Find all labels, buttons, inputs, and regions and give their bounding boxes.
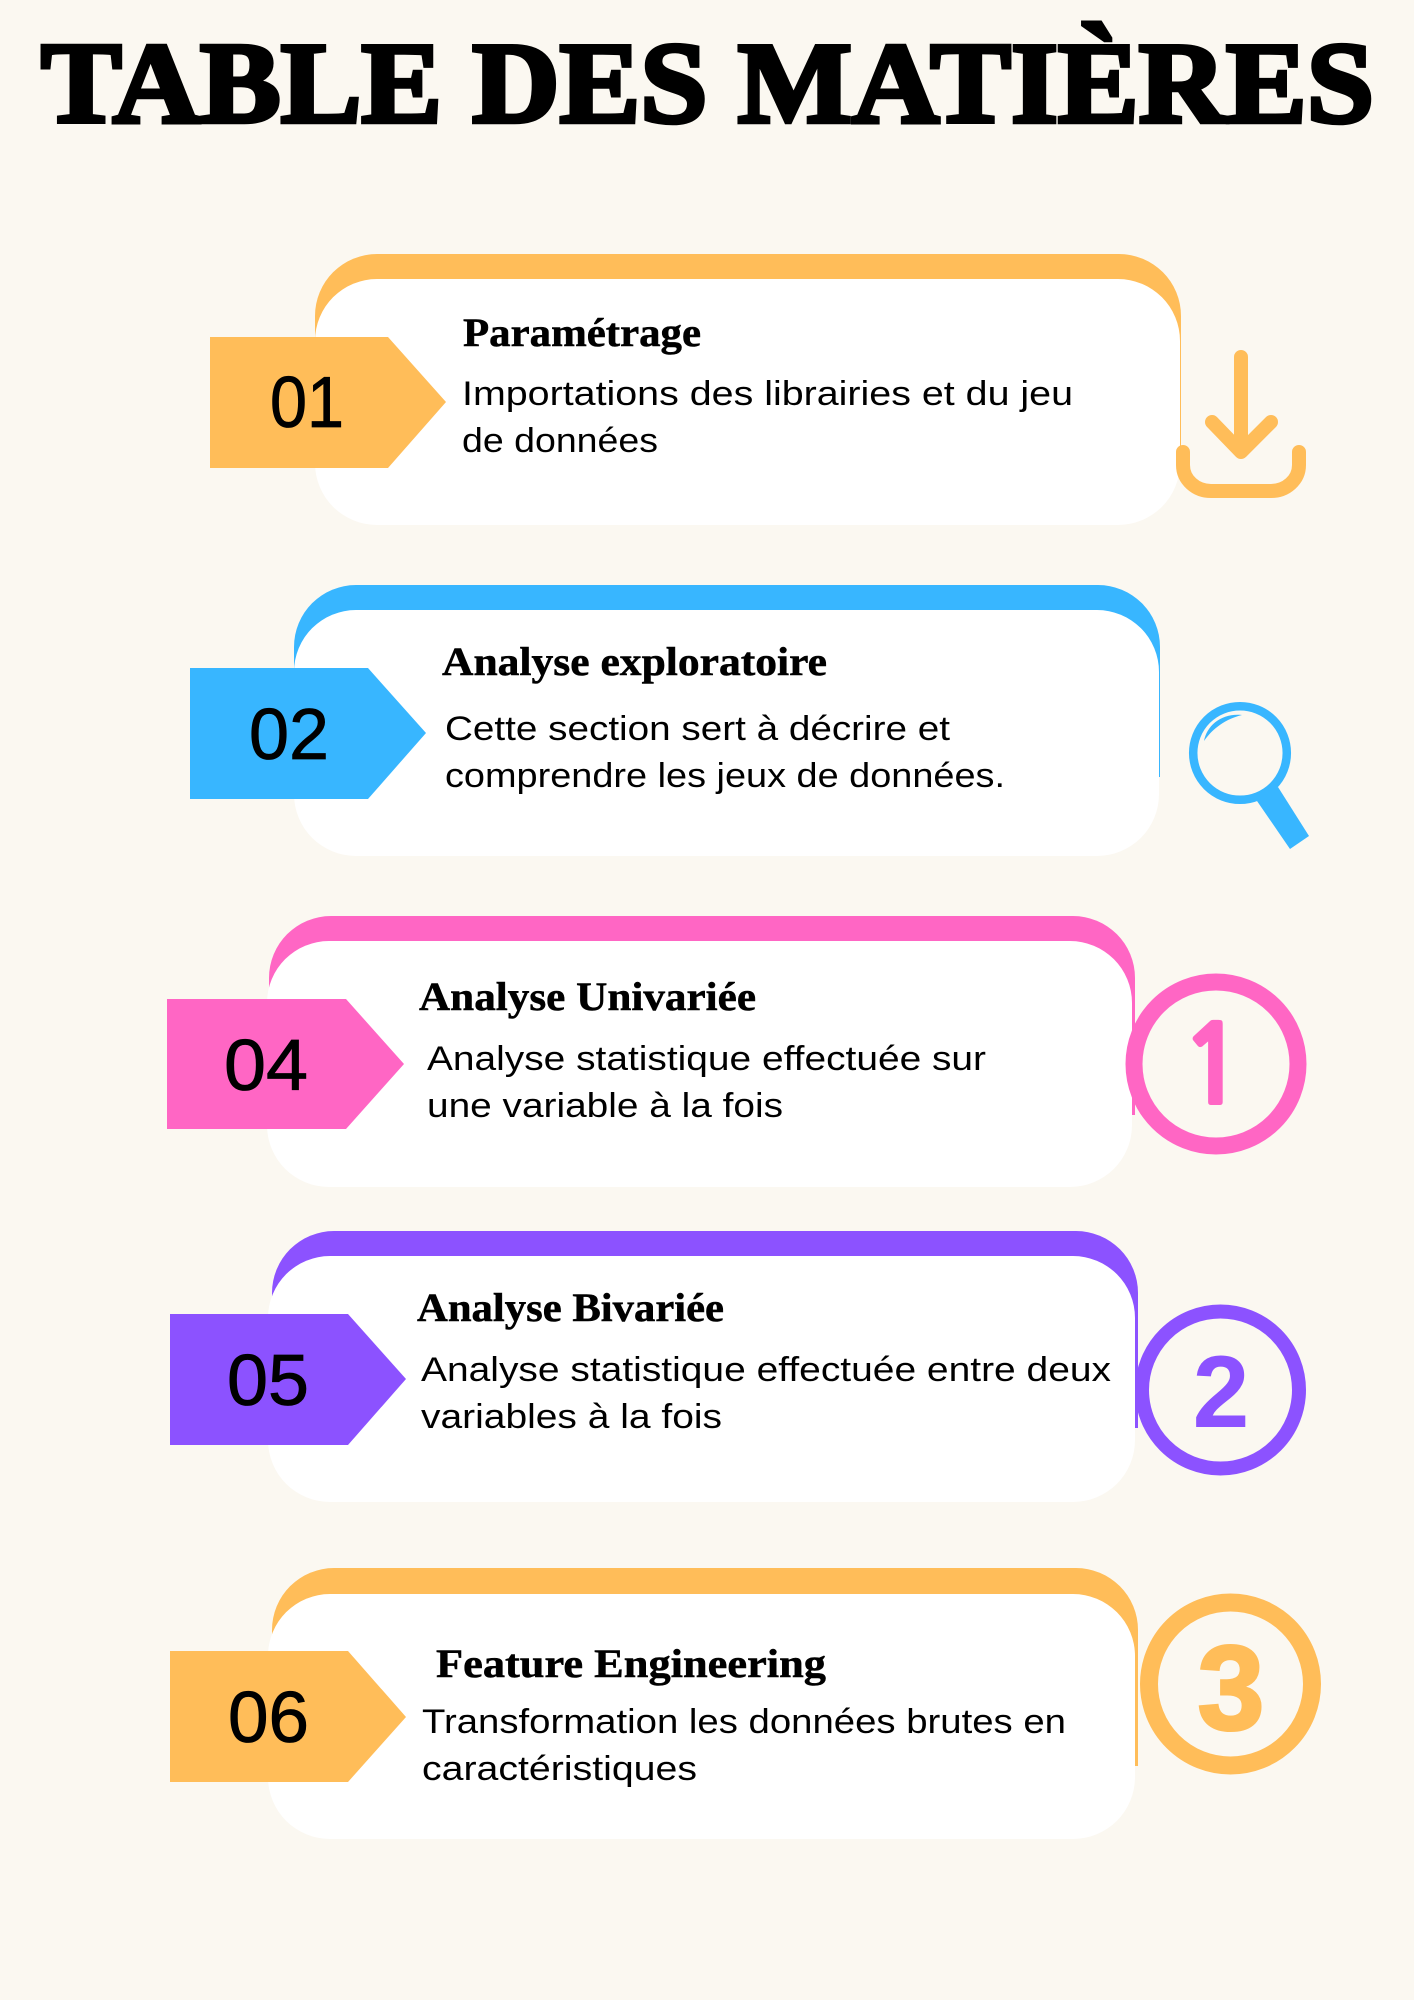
icon: circled 3: 3 (1198, 1621, 1264, 1755)
number tag 02 (190, 668, 426, 799)
heading: Analyse Univariée (419, 974, 756, 1019)
panel: 04 Analyse Univariée (167, 916, 1135, 1187)
panel: 06 Feature Engineering (170, 1568, 1138, 1839)
description (427, 1040, 986, 1125)
number tag 06 (170, 1651, 406, 1782)
icon: magnifying glass (1193, 706, 1309, 849)
heading: Feature Engineering (436, 1641, 826, 1686)
description: de données (462, 422, 658, 460)
panel: 02 Analyse exploratoire (190, 585, 1160, 856)
number tag 05 (170, 1314, 406, 1445)
icon: circled 3 (1149, 1602, 1312, 1766)
number tag 05: 05 (227, 1341, 309, 1421)
icon: circled 2 (1142, 1312, 1299, 1468)
icon: circled 2: 2 (1193, 1335, 1249, 1449)
title: TABLE DES MATIÈRES (41, 20, 1374, 147)
description: caractéristiques (422, 1750, 697, 1788)
description: Cette section sert à décrire et (445, 710, 951, 748)
description (422, 1703, 1066, 1788)
description: Transformation les données brutes en (422, 1703, 1066, 1741)
icon: circled 1 (1134, 982, 1298, 1146)
description: Importations des librairies et du jeu (462, 375, 1073, 413)
number tag 01: 01 (270, 363, 344, 443)
description: comprendre les jeux de données. (445, 757, 1005, 795)
description: Analyse statistique effectuée sur (427, 1040, 986, 1078)
number tag 01 (210, 337, 446, 468)
description: variables à la fois (421, 1398, 722, 1436)
description (445, 710, 1005, 795)
number tag 02: 02 (249, 695, 329, 775)
heading: Analyse Bivariée (417, 1285, 724, 1330)
number tag 04: 04 (224, 1026, 308, 1106)
description (421, 1351, 1111, 1436)
description: une variable à la fois (427, 1087, 783, 1125)
icon: circled 1: 1 (1180, 1013, 1246, 1120)
number tag 04 (167, 999, 404, 1129)
heading: Paramétrage (463, 310, 701, 355)
panel: 01 Paramétrage (210, 254, 1181, 525)
panel: 05 Analyse Bivariée (170, 1231, 1138, 1502)
description: Analyse statistique effectuée entre deux (421, 1351, 1111, 1389)
number tag 06: 06 (228, 1678, 309, 1758)
description (462, 375, 1073, 460)
icon: download (1183, 357, 1299, 491)
heading: Analyse exploratoire (442, 639, 827, 684)
